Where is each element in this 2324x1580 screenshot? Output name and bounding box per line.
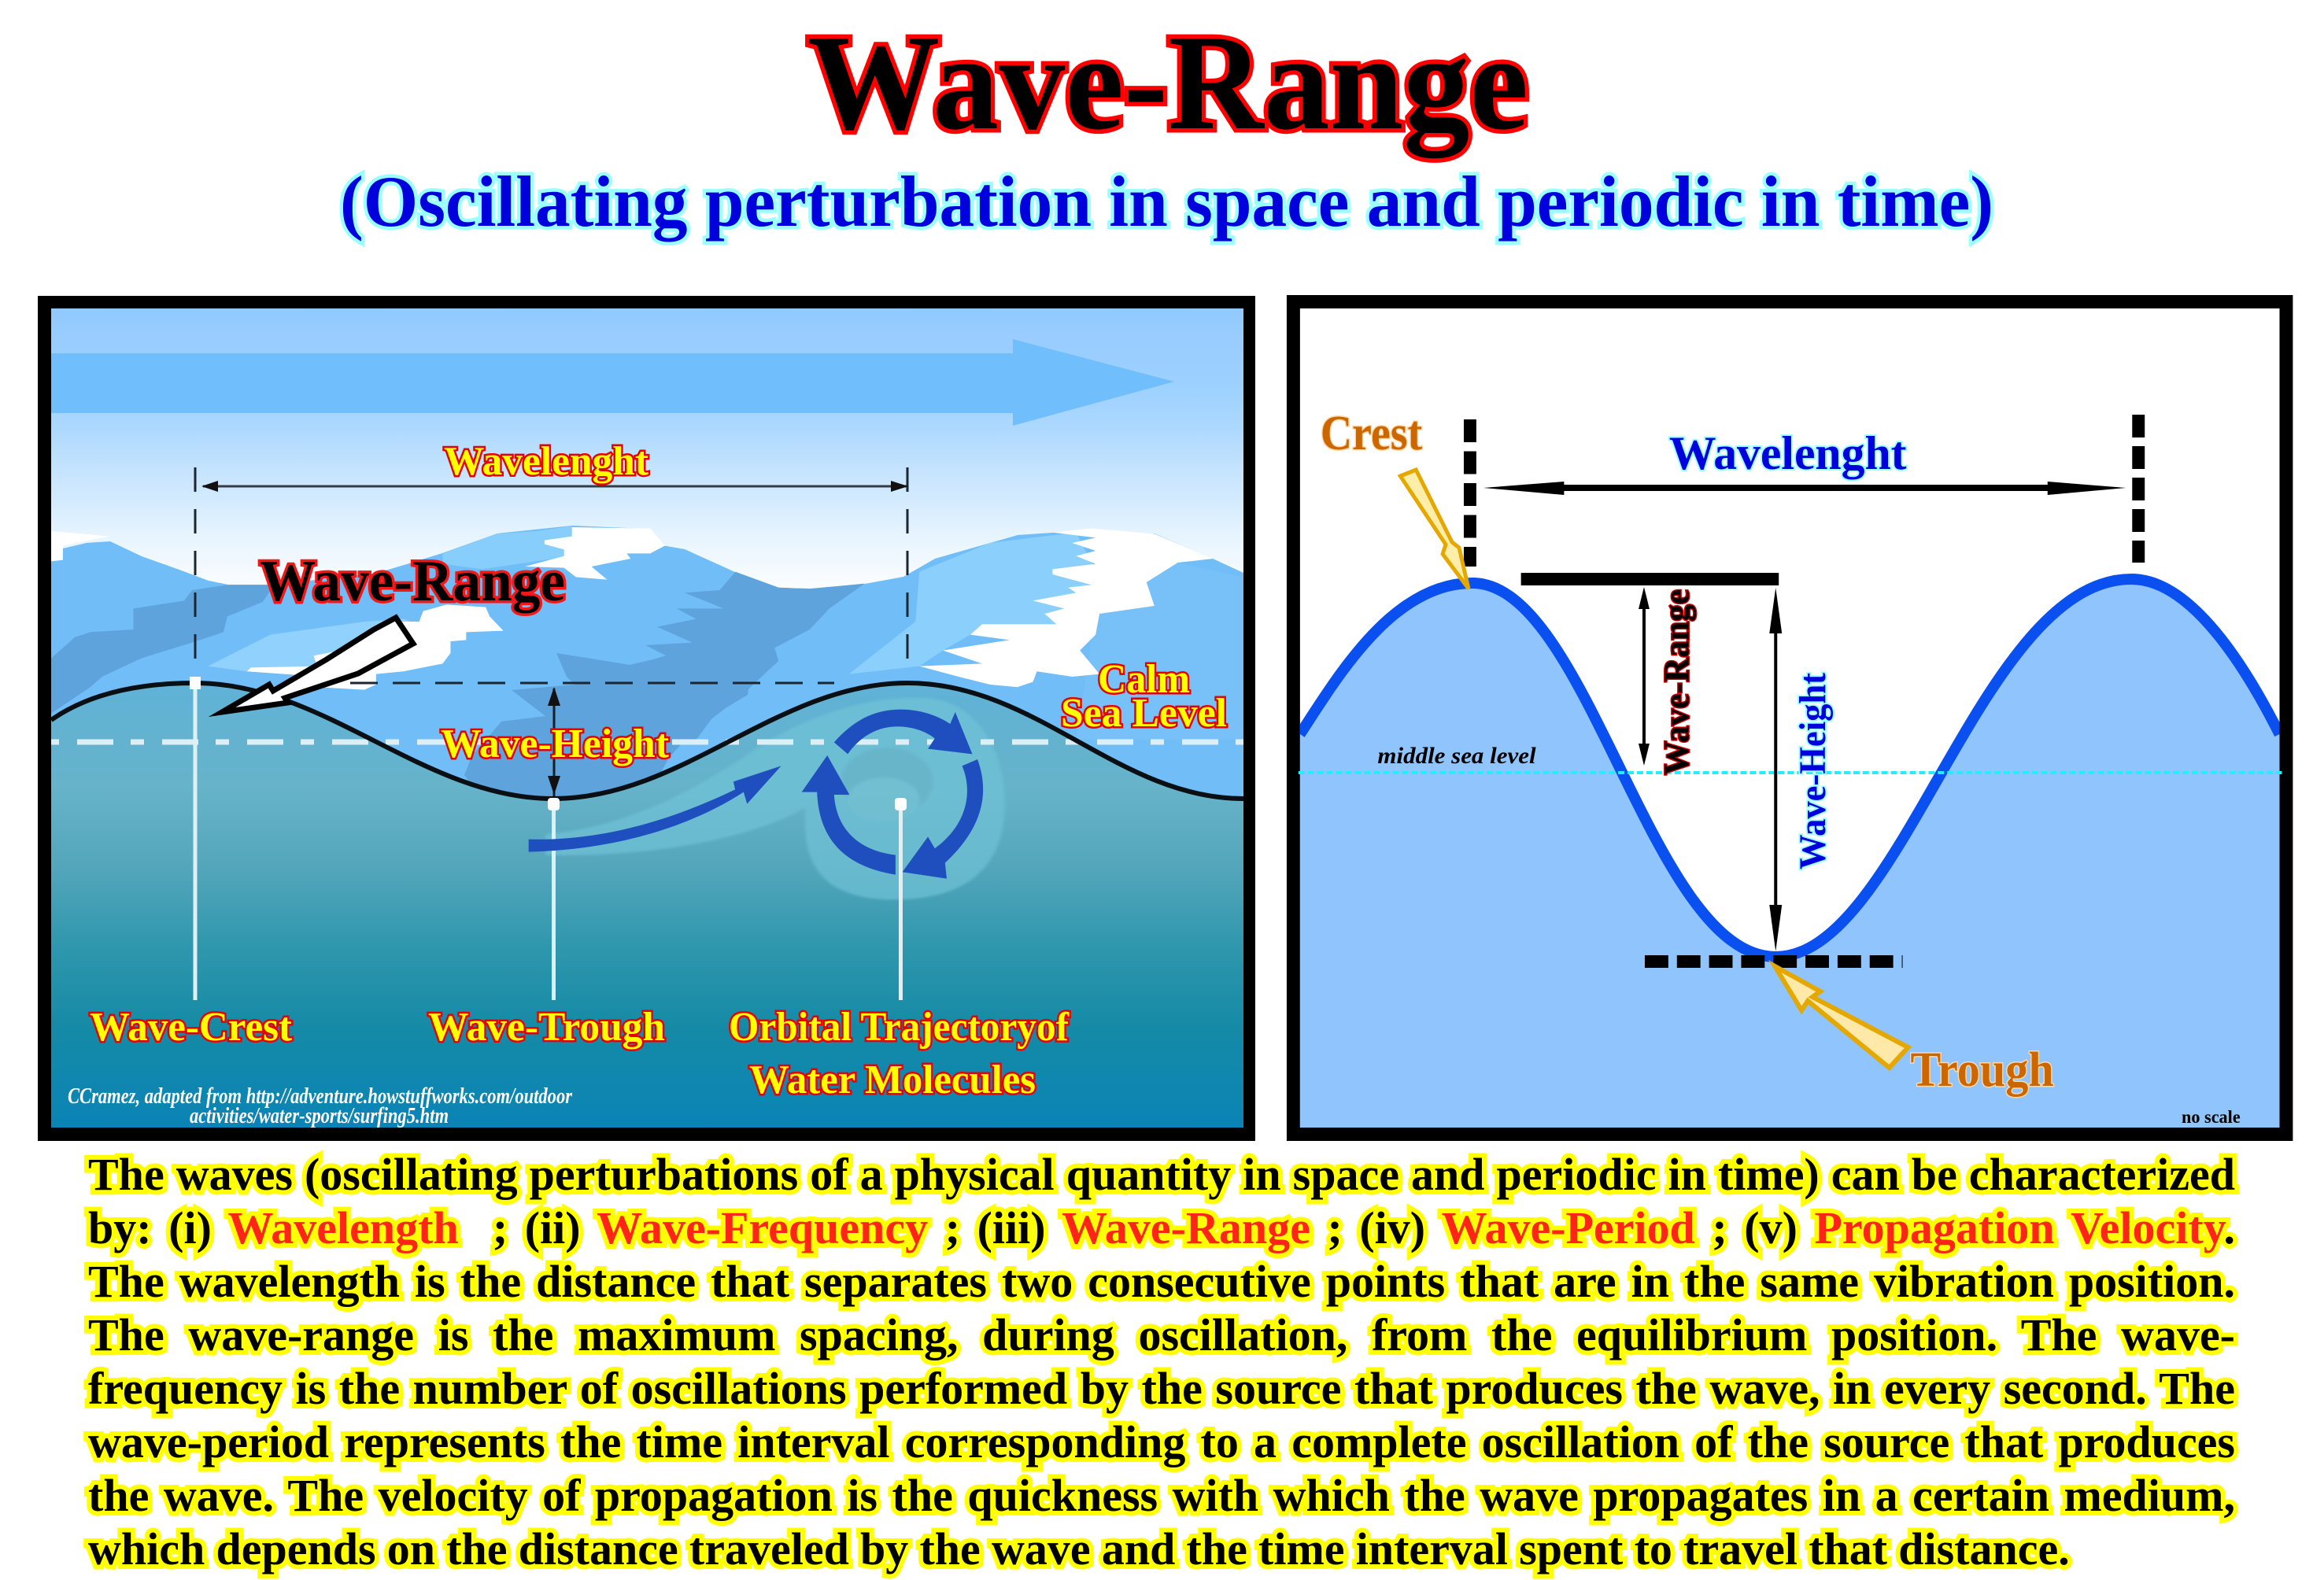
credit text <box>68 1084 573 1128</box>
trough guide dashes <box>1645 955 1903 968</box>
label: wave-height: Wave-Height <box>441 722 670 766</box>
label: wave-height vertical: Wave-Height <box>1792 673 1834 869</box>
body text block: frequency is the number of oscillations performed by the source that produces the wave, in every second. The <box>88 1363 2235 1414</box>
arrow: wave height dimension <box>548 687 560 796</box>
body text block: which depends on the distance traveled by the wave and the time interval spent to travel that distance. <box>88 1523 2070 1574</box>
body text block: The wave-range is the maximum spacing, during oscillation, from the equilibrium position. The wave- <box>88 1309 2235 1360</box>
credit text: activities/water-sports/surfing5.htm <box>190 1104 449 1128</box>
body text block: The wavelength is the distance that separates two consecutive points that are in the same vibration position. <box>88 1256 2235 1307</box>
label: wave-range vertical: Wave-Range <box>1657 589 1697 775</box>
sea water <box>51 677 1243 1128</box>
crest reference bar <box>1521 573 1779 585</box>
panel: wave scene illustration <box>38 296 1255 1141</box>
panel: wave profile diagram <box>1287 295 2293 1141</box>
credit text: CCramez, adapted from http://adventure.howstuffworks.com/outdoor <box>68 1084 573 1109</box>
label: crest: Crest <box>1321 407 1423 460</box>
label: no scale: no scale <box>2182 1107 2241 1127</box>
water fill <box>1300 579 2279 1128</box>
arrow: wave-range dimension <box>1639 587 1650 766</box>
calm sea level dash-dot line <box>51 740 1243 744</box>
blue flow arrows <box>529 710 983 879</box>
body text block: the wave. The velocity of propagation is the quickness with which the wave propagates in a certain medium, <box>88 1470 2235 1521</box>
crest and wavelength guide lines <box>195 467 907 683</box>
label: orbital trajectory <box>729 1010 1071 1095</box>
crest guide dashes <box>1470 415 2138 567</box>
middle sea level dashed line <box>1299 771 2282 774</box>
wave curve <box>1300 579 2279 957</box>
title: Wave-Range <box>807 6 1528 158</box>
body text block <box>83 1149 2240 1578</box>
arrow: wavelength dimension <box>201 481 908 492</box>
label: calm sea level <box>1061 663 1229 729</box>
arrow: trough pointer <box>1775 966 1908 1068</box>
arrow: crest pointer <box>1400 470 1469 589</box>
label: wavelength: Wavelenght <box>1669 427 1907 479</box>
label: trough: Trough <box>1911 1043 2054 1097</box>
arrow: wave-height dimension <box>1769 588 1782 951</box>
wave surface curve <box>51 683 1243 799</box>
body text block: wave-period represents the time interval corresponding to a complete oscillation of the source that produces <box>88 1416 2235 1467</box>
label: wavelength: Wavelenght <box>444 439 649 484</box>
subtitle: (Oscillating perturbation in space and periodic in time) <box>340 161 1993 242</box>
white callout arrow <box>222 618 413 712</box>
label: orbital trajectory: Water Molecules <box>749 1058 1036 1102</box>
white vertical markers <box>190 677 907 1000</box>
label: wave-range: Wave-Range <box>260 549 565 614</box>
label: calm sea level: Sea Level <box>1061 691 1227 736</box>
arrow: wavelength dimension <box>1483 482 2126 495</box>
mountains behind the sea <box>51 526 1243 796</box>
body text block: The waves (oscillating perturbations of a physical quantity in space and periodic in time) can be characterized <box>88 1149 2235 1200</box>
label: calm sea level: Calm <box>1098 657 1190 702</box>
body text block: by: (i) Wavelength ; (ii) Wave-Frequency ; (iii) Wave-Range ; (iv) Wave-Period ; (v) Propagation Velocity. <box>88 1202 2235 1253</box>
label: middle sea level: middle sea level <box>1377 743 1536 769</box>
label: wave-crest: Wave-Crest <box>90 1005 293 1050</box>
label: wave-trough: Wave-Trough <box>428 1005 665 1050</box>
icon: wave direction arrow <box>51 339 1174 426</box>
label: orbital trajectory: Orbital Trajectoryof <box>729 1005 1070 1050</box>
